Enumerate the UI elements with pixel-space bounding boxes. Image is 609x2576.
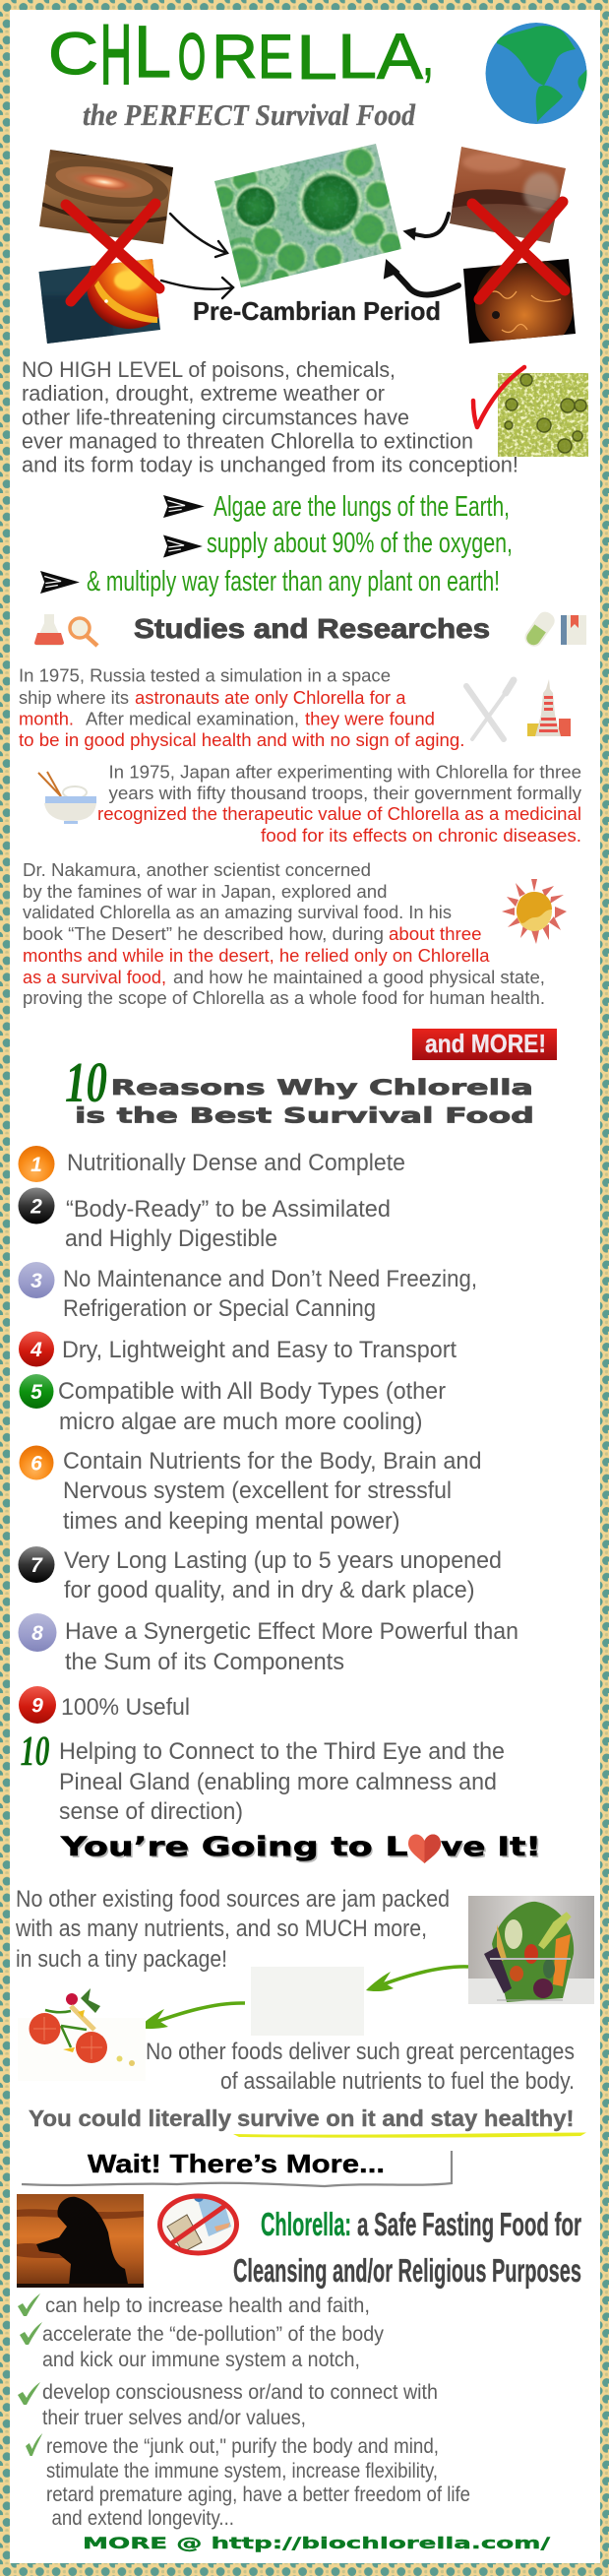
title: E	[258, 23, 293, 92]
badge: and more: and MORE!	[425, 1029, 546, 1058]
reason 2: and Highly Digestible	[65, 1225, 277, 1252]
tagline: going to love it: You’re Going to L	[60, 1832, 407, 1862]
benefit 4: stimulate the immune system, increase flexibility,	[46, 2460, 438, 2482]
study: dr. nakamura: validated Chlorella as an amazing survival food. In his	[23, 902, 452, 922]
label: Pre-Cambrian Period: Pre-Cambrian Period	[193, 296, 441, 326]
benefit 4: retard premature aging, have a better freedom of life	[46, 2483, 470, 2506]
benefit 3: develop consciousness or/and to connect with	[42, 2381, 438, 2404]
heading: 10 reasons	[65, 1050, 534, 1128]
study: japan	[97, 762, 582, 846]
study: russia: ship where its	[19, 687, 129, 708]
title: O	[178, 20, 206, 93]
red X: left	[66, 204, 159, 301]
reason 4: 4	[30, 1339, 42, 1361]
tagline: going to love it: You’re Going to L	[62, 1834, 409, 1864]
reason 3: No Maintenance and Don’t Need Freezing,	[63, 1266, 477, 1292]
heading: 10 reasons: is the Best Survival Food	[75, 1104, 534, 1128]
arrow: top left to chlorella	[170, 214, 227, 257]
paragraph: no high level: other life-threatening circumstances have	[22, 406, 409, 429]
title: ,	[422, 22, 434, 88]
icon: sun	[502, 879, 567, 944]
reason 1	[18, 1146, 405, 1182]
reason 4: Dry, Lightweight and Easy to Transport	[62, 1337, 457, 1363]
study: dr. nakamura	[23, 859, 545, 1008]
benefit 1: can help to increase health and faith,	[45, 2294, 370, 2317]
reason 9	[19, 1686, 190, 1724]
paragraph: no high level: and its form today is unchanged from its conception!	[22, 453, 518, 476]
reason 6: times and keeping mental power)	[63, 1508, 399, 1535]
benefit 2: and kick our immune system a notch,	[42, 2349, 360, 2371]
reason 10: 10	[20, 1728, 49, 1775]
icon: noodle bowl	[38, 772, 96, 824]
red X: right	[472, 202, 565, 299]
reason 1: Nutritionally Dense and Complete	[67, 1150, 405, 1176]
icon: test tube	[521, 608, 558, 650]
reason 10: Helping to Connect to the Third Eye and the	[59, 1738, 505, 1765]
reason 7: Very Long Lasting (up to 5 years unopened	[64, 1547, 502, 1574]
photo: man praying at sunset	[17, 2194, 144, 2288]
icon: book	[561, 615, 586, 645]
study: russia: astronauts ate only Chlorella for a	[135, 687, 406, 708]
benefit 4	[26, 2433, 470, 2530]
arrow: basket to box	[366, 1967, 468, 1991]
benefit 4: remove the “junk out," purify the body and mind,	[46, 2435, 439, 2458]
paragraph: jam packed: in such a tiny package!	[16, 1946, 227, 1973]
title: L	[134, 11, 171, 93]
title: H	[100, 8, 132, 102]
study: dr. nakamura: Dr. Nakamura, another scientist concerned	[23, 859, 371, 880]
study: japan: food for its effects on chronic diseases.	[261, 825, 581, 846]
heading: safe fasting food	[233, 2206, 581, 2289]
heading: studies and researches: Studies and Researches	[134, 613, 490, 644]
heading: 10 reasons: 10	[65, 1050, 107, 1114]
illustration: vegetable figure	[18, 1988, 146, 2081]
paragraph: no high level	[22, 357, 518, 476]
photo: volcanic earth	[450, 147, 566, 243]
reason 6: Contain Nutrients for the Body, Brain and	[63, 1448, 482, 1475]
study: russia: In 1975, Russia tested a simulation in a space	[19, 665, 391, 685]
arrow: bottom right to chlorella	[385, 261, 458, 294]
reason 9: 100% Useful	[61, 1694, 190, 1721]
icon: globe	[486, 23, 587, 124]
icon: heart	[408, 1835, 441, 1863]
placeholder: pale box	[251, 1967, 364, 2036]
icon: no food or water sign	[157, 2192, 240, 2256]
study: dr. nakamura: proving the scope of Chlorella as a whole food for human health.	[23, 987, 545, 1008]
benefit 2	[20, 2322, 384, 2371]
study: dr. nakamura: by the famines of war in Japan, explored and	[23, 881, 388, 902]
reason 10	[20, 1728, 505, 1825]
study: dr. nakamura: as a survival food,	[23, 967, 166, 987]
photo: burning planet	[39, 259, 160, 344]
study: russia: month.	[19, 709, 74, 728]
statement: survive on it	[29, 2105, 586, 2138]
title: C	[48, 21, 98, 87]
photo: vegetable basket	[468, 1896, 594, 2004]
icon: pennant 3	[40, 571, 80, 594]
title	[48, 8, 434, 102]
icon: pennant 1	[163, 495, 205, 518]
heading: 10 reasons: Reasons Why Chlorella	[110, 1076, 533, 1100]
footer link: MORE @ http://biochlorella.com/	[83, 2534, 550, 2552]
reason 9: 9	[31, 1695, 43, 1717]
benefit 2: accelerate the “de-pollution” of the body	[42, 2323, 384, 2346]
title: L	[296, 22, 337, 93]
statement: survive on it: survive on it and stay healthy!	[237, 2105, 575, 2131]
reason 7: for good quality, and in dry & dark place)	[64, 1577, 474, 1603]
paragraph: great percentages	[146, 2039, 575, 2095]
reason 8: the Sum of its Components	[65, 1649, 344, 1675]
reason 7	[18, 1546, 502, 1603]
benefit 3	[18, 2381, 438, 2429]
photo: chlorella cells	[214, 144, 401, 287]
reason 3: 3	[30, 1270, 42, 1292]
reason 6: Nervous system (excellent for stressful	[63, 1477, 452, 1504]
tagline: going to love it: ve It!	[441, 1832, 541, 1862]
icon: red check mark	[473, 367, 524, 427]
banner: wait there's more	[22, 2149, 452, 2186]
study: russia: After medical examination,	[86, 709, 299, 728]
reason 5: 5	[30, 1381, 42, 1404]
reason 2: 2	[30, 1195, 42, 1219]
study: russia	[19, 665, 464, 750]
benefit 3: their truer selves and/or values,	[42, 2407, 306, 2429]
benefit 4: and extend longevity...	[51, 2507, 234, 2530]
reason 6	[20, 1445, 482, 1535]
banner: wait there's more: Wait! There’s More...	[88, 2149, 385, 2178]
title: L	[337, 21, 377, 92]
study: dr. nakamura: months and while in the desert, he relied only on Chlorella	[23, 945, 490, 966]
study: japan: In 1975, Japan after experimenting with Chlorella for three	[108, 762, 581, 782]
reason 5	[20, 1374, 446, 1435]
study: dr. nakamura: and how he maintained a good physical state,	[173, 967, 545, 987]
yellow underline	[233, 2132, 586, 2138]
claim: oxygen: supply about 90% of the oxygen,	[207, 528, 513, 559]
tagline: going to love it: ve It!	[443, 1834, 543, 1864]
reason 8: 8	[31, 1622, 43, 1645]
subtitle: the PERFECT Survival Food	[83, 97, 415, 132]
reason 4	[19, 1331, 457, 1366]
icon: flask	[34, 614, 64, 646]
reason 8	[18, 1613, 518, 1675]
paragraph: no high level: ever managed to threaten Chlorella to extinction	[22, 429, 473, 453]
study: dr. nakamura: book “The Desert” he described how, during	[23, 923, 384, 944]
arrow: bottom left to chlorella	[161, 278, 233, 298]
heading: safe fasting food: Chlorella:	[261, 2206, 351, 2242]
study: russia: to be in good physical health and with no sign of aging.	[19, 729, 464, 750]
arrow: top right to chlorella	[404, 214, 449, 239]
icon: fork and knife	[466, 680, 514, 739]
reason 10: sense of direction)	[59, 1798, 243, 1825]
reason 3	[18, 1262, 477, 1322]
study: japan: recognized the therapeutic value of Chlorella as a medicinal	[97, 803, 581, 824]
reason 8: Have a Synergetic Effect More Powerful than	[65, 1618, 518, 1645]
reason 10: Pineal Gland (enabling more calmness and	[59, 1769, 497, 1795]
paragraph: no high level: radiation, drought, extreme weather or	[22, 381, 385, 406]
statement: survive on it: You could literally	[29, 2105, 231, 2131]
icon: pennant 2	[163, 535, 203, 557]
title: R	[212, 23, 258, 92]
paragraph: jam packed: No other existing food sources are jam packed	[16, 1886, 450, 1913]
study: japan: years with fifty thousand troops, their government formally	[108, 783, 582, 803]
photo: protoplanetary disk	[39, 150, 173, 244]
photo: molten planet	[463, 259, 576, 344]
title: A	[377, 20, 423, 93]
photo: chlorella micrograph	[498, 373, 588, 457]
paragraph: jam packed	[15, 1886, 450, 1973]
tagline: going to love it	[60, 1832, 543, 1864]
paragraph: no high level: NO HIGH LEVEL of poisons, chemicals,	[22, 357, 396, 382]
reason 5: Compatible with All Body Types (other	[58, 1378, 446, 1405]
icon: magnifier	[70, 618, 97, 646]
reason 1: 1	[30, 1154, 42, 1176]
paragraph: jam packed: with as many nutrients, and so MUCH more,	[15, 1916, 427, 1942]
reason 6: 6	[30, 1453, 42, 1475]
icon: tower	[527, 679, 571, 736]
reason 3: Refrigeration or Special Canning	[63, 1295, 376, 1322]
reason 7: 7	[30, 1554, 43, 1577]
reason 2: “Body-Ready” to be Assimilated	[66, 1196, 391, 1223]
study: dr. nakamura: about three	[389, 923, 482, 944]
arrow: box to vegetables	[139, 2003, 245, 2029]
study: russia: they were found	[305, 709, 435, 728]
reason 2	[18, 1187, 391, 1252]
reason 5: micro algae are much more cooling)	[59, 1409, 423, 1435]
